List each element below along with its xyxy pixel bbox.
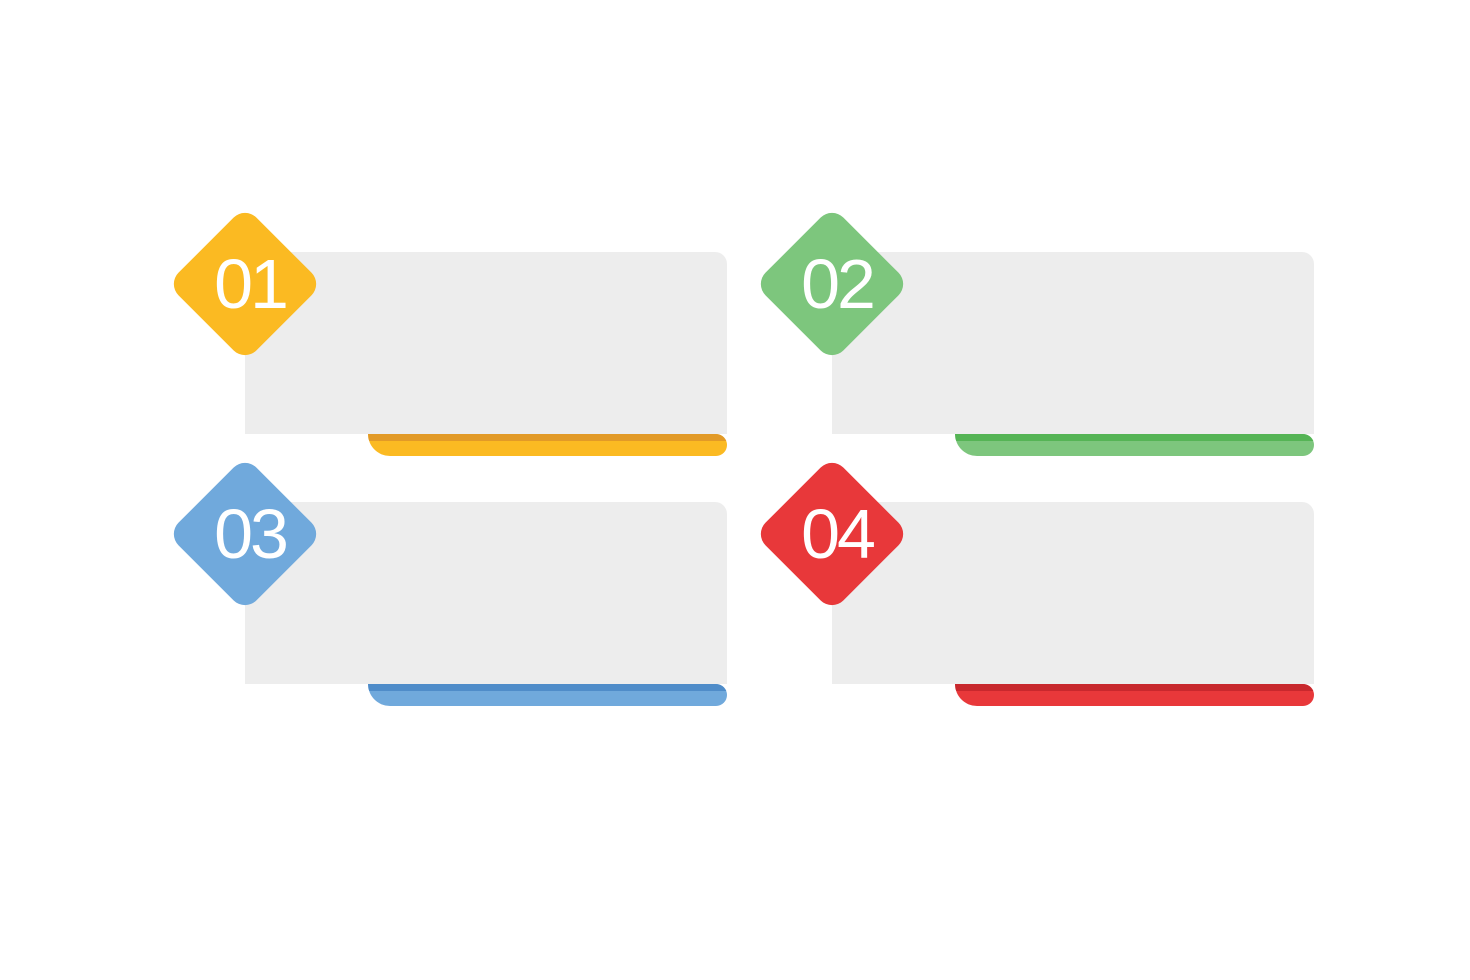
number 04: 04: [801, 495, 873, 573]
bar 03: [368, 684, 727, 706]
panel 04: [832, 502, 1314, 684]
card 01: [174, 212, 727, 456]
diamond 03: [167, 456, 323, 612]
number 02: 02: [801, 245, 873, 323]
bar 02: [955, 434, 1314, 456]
number 01: 01: [214, 245, 286, 323]
card 02: [760, 212, 1314, 456]
diamond 04: [754, 456, 910, 612]
card 04: [760, 462, 1314, 706]
diamond 02: [754, 206, 910, 362]
panel 03: [245, 502, 727, 684]
panel 02: [832, 252, 1314, 434]
diamond 01: [167, 206, 323, 362]
number 03: 03: [214, 495, 286, 573]
bar 04: [955, 684, 1314, 706]
bar 01: [368, 434, 727, 456]
panel 01: [245, 252, 727, 434]
card 03: [174, 462, 727, 706]
